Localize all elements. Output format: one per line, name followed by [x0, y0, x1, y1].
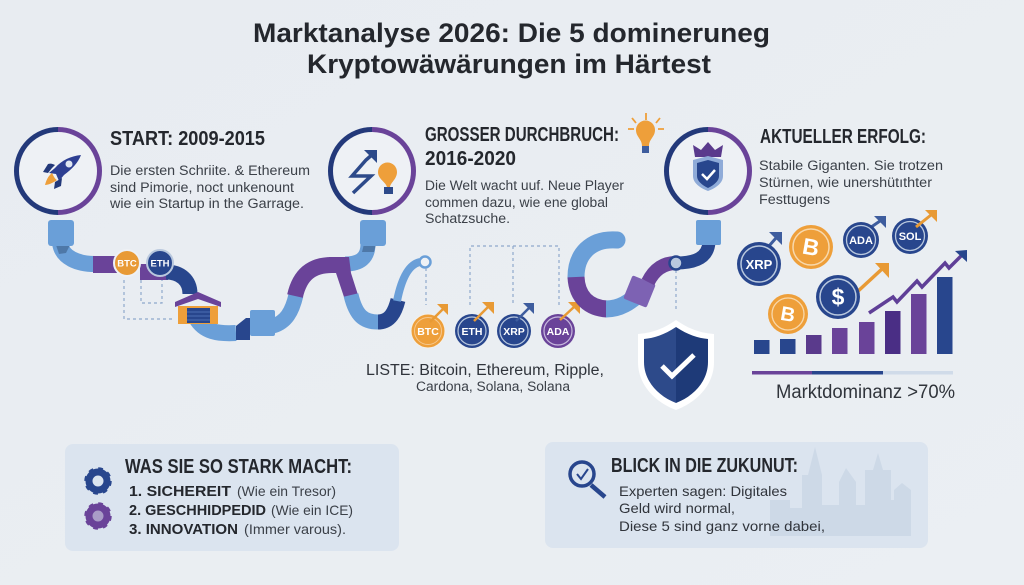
- circle icon: lightning and bulb: [330, 130, 413, 212]
- heading: start: wie ein Startup in the Garrage.: [109, 196, 304, 211]
- bar chart: [754, 277, 952, 354]
- list text: [366, 362, 604, 394]
- icon: blue gear: [86, 469, 110, 493]
- heading: current success: Festtugens: [759, 192, 830, 207]
- pipeline: left section: [48, 220, 430, 340]
- heading: start: [109, 128, 310, 211]
- heading: future: BLICK IN DIE ZUKUNUT:: [611, 455, 798, 477]
- coin: ETH small: ETH: [150, 258, 170, 270]
- coin: ADA medium: [843, 216, 886, 258]
- heading: breakthrough: GROSSER DURCHBRUCH:: [425, 124, 619, 146]
- market dominance bar: [752, 371, 955, 403]
- title: [253, 18, 770, 79]
- icon: garage: [175, 292, 221, 324]
- coin: dollar: $: [832, 284, 845, 310]
- title: Kryptowäwärungen im Härtest: [307, 49, 711, 79]
- heading: start: Die ersten Schriite. & Ethereum: [110, 163, 310, 178]
- coin: bitcoin large: [789, 225, 833, 269]
- city skyline: [770, 447, 911, 536]
- title: Marktanalyse 2026: Die 5 domineruneg: [253, 18, 770, 48]
- strengths list: 3. INNOVATION: [129, 521, 238, 538]
- heading: breakthrough: [425, 124, 625, 226]
- coin: bitcoin small: [768, 294, 808, 334]
- coin: dollar: [816, 263, 889, 319]
- panel: future: [545, 442, 928, 548]
- coin: ADA: [541, 302, 580, 348]
- circle icon: rocket: [16, 130, 99, 212]
- future text: Geld wird normal,: [619, 500, 735, 516]
- coin: BTC small: [114, 250, 140, 276]
- heading: strengths: WAS SIE SO STARK MACHT:: [125, 456, 352, 478]
- coin: XRP: [497, 303, 534, 348]
- coin: XRP large: XRP: [746, 257, 773, 272]
- coin: ETH small: [147, 250, 173, 276]
- heading: current success: Stürnen, wie unershütıthter: [759, 175, 933, 190]
- coin: SOL medium: SOL: [899, 231, 922, 243]
- coin: ETH: [455, 302, 494, 348]
- icon: top lightbulb: [628, 113, 664, 153]
- coin: BTC: [411, 304, 448, 348]
- future text: [619, 483, 825, 534]
- heading: breakthrough: commen dazu, wie ene global: [425, 195, 608, 210]
- coin: BTC small: BTC: [117, 258, 137, 270]
- strengths list: 2. GESCHHIDPEDID: [129, 502, 266, 519]
- coin: ETH: ETH: [462, 326, 482, 338]
- strengths list: (Wie ein Tresor): [237, 483, 336, 499]
- icon: large shield: [638, 320, 714, 410]
- strengths list: 1. SICHEREIT: [129, 483, 231, 500]
- coin: XRP: XRP: [503, 326, 525, 338]
- market dominance bar: Marktdominanz >70%: [776, 382, 955, 403]
- strengths list: [129, 483, 353, 538]
- circle icon: crown shield: [666, 130, 749, 212]
- dashed connectors middle: [426, 246, 676, 312]
- coin: ADA medium: ADA: [849, 235, 873, 247]
- pipeline: right section: [576, 220, 721, 309]
- heading: current success: Stabile Giganten. Sie trotzen: [759, 158, 943, 173]
- coin: bitcoin large: B: [801, 233, 821, 261]
- heading: breakthrough: 2016-2020: [425, 148, 516, 170]
- panel: strengths: [65, 444, 399, 551]
- coin: ADA: ADA: [547, 326, 570, 338]
- future text: Experten sagen: Digitales: [619, 483, 787, 499]
- coin row with arrows: [411, 302, 580, 348]
- icon: magnifier: [570, 462, 605, 497]
- heading: start: sind Pimorie, noct unkenount: [110, 180, 294, 195]
- heading: start: START: 2009-2015: [110, 128, 265, 150]
- heading: breakthrough: Schatzsuche.: [425, 211, 510, 226]
- heading: current success: AKTUELLER ERFOLG:: [760, 126, 926, 148]
- coin: XRP large: [737, 232, 782, 286]
- heading: breakthrough: Die Welt wacht uuf. Neue Player: [425, 178, 625, 193]
- heading: current success: [759, 126, 943, 207]
- trend arrow: [869, 250, 967, 313]
- strengths list: (Immer varous).: [244, 521, 346, 537]
- future text: Diese 5 sind ganz vorne dabei,: [619, 518, 825, 534]
- coin cluster: [737, 210, 937, 334]
- dashed connectors left: [124, 280, 175, 319]
- coin: bitcoin small: B: [779, 303, 797, 327]
- list text: LISTE: Bitcoin, Ethereum, Ripple,: [366, 362, 604, 379]
- coin: BTC: BTC: [417, 326, 439, 338]
- list text: Cardona, Solana, Solana: [416, 379, 570, 394]
- strengths list: (Wie ein ICE): [271, 502, 353, 518]
- coin: SOL medium: [892, 210, 937, 254]
- icon: purple gear: [86, 504, 110, 528]
